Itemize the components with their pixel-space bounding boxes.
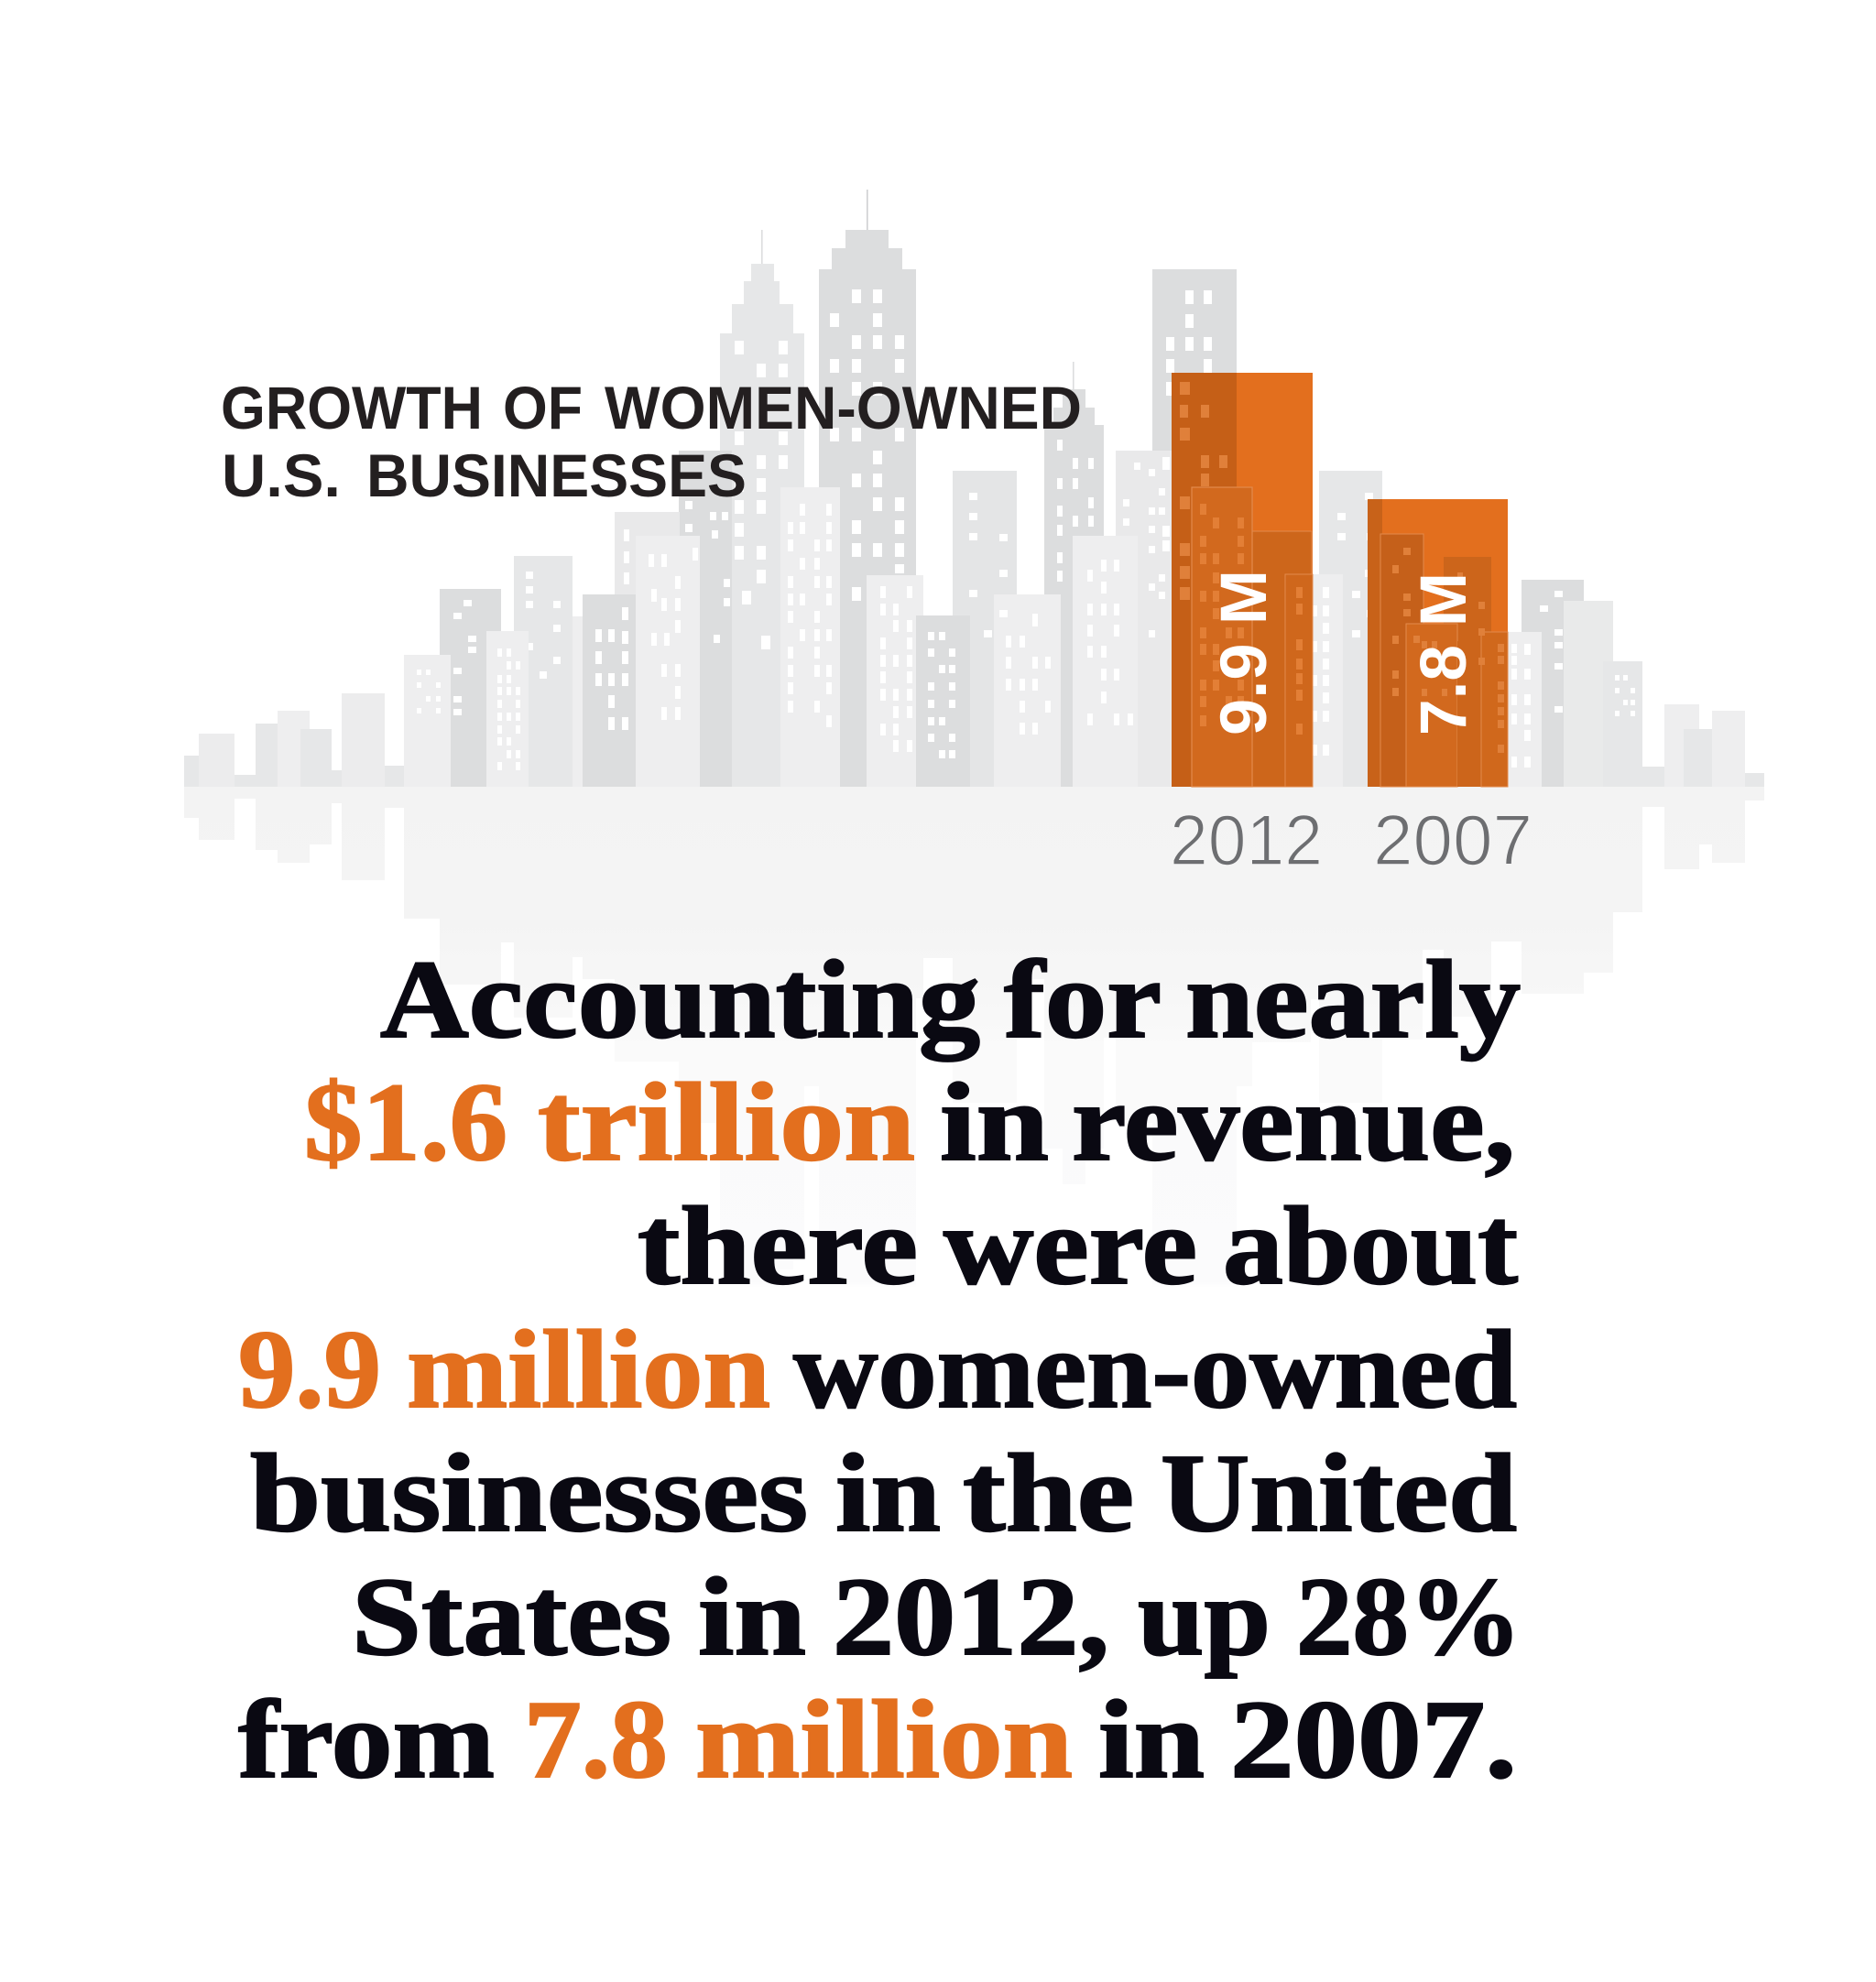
building: light tall left	[636, 536, 700, 787]
building: small windows	[404, 655, 451, 787]
main statement text: 2007.	[1230, 1678, 1517, 1802]
city skyline	[184, 190, 1764, 787]
main statement text: in	[1098, 1678, 1205, 1802]
building: dark with grid	[583, 594, 636, 787]
main statement text: businesses	[250, 1432, 808, 1555]
building: light tall centre	[780, 487, 840, 787]
chart title: OF	[503, 374, 583, 441]
building: pale left of 2012 bar	[1116, 451, 1172, 787]
skyline reflection	[184, 787, 1764, 1344]
building: dark block with wide windows	[679, 451, 732, 787]
chart title: GROWTH	[221, 374, 483, 441]
chart title: BUSINESSES	[366, 441, 747, 509]
building: dark small windows	[916, 615, 970, 787]
main statement text: up	[1138, 1555, 1271, 1679]
bar: 2007	[1368, 499, 1508, 787]
far right low buildings	[1642, 704, 1764, 787]
main statement text: United	[1161, 1432, 1517, 1555]
building: medium grey	[514, 556, 583, 787]
main statement text: were	[943, 1184, 1197, 1308]
buildings: right side	[1481, 580, 1642, 787]
main statement text: the	[963, 1432, 1134, 1555]
building: right of 2012 bar	[1285, 574, 1343, 787]
main statement text: women-owned	[793, 1308, 1517, 1432]
main statement text: 2012,	[833, 1555, 1109, 1679]
chart title: U.S.	[222, 441, 341, 509]
main statement text: there	[638, 1184, 918, 1308]
main statement text	[238, 938, 1522, 1802]
tower: twin dark	[819, 190, 916, 787]
chart title	[221, 374, 1082, 509]
main statement text: 7.8	[524, 1678, 668, 1802]
far left low buildings	[184, 693, 404, 787]
building: narrow light	[486, 631, 529, 787]
chart title: WOMEN-OWNED	[605, 374, 1082, 441]
building: between bars	[1319, 471, 1382, 787]
main statement text: trillion	[538, 1061, 915, 1184]
year labels: 2007	[1373, 800, 1532, 880]
main statement text: from	[238, 1678, 495, 1802]
main statement text: million	[407, 1308, 770, 1432]
tower: stepped spire	[720, 230, 804, 787]
main statement text: $1.6	[304, 1061, 507, 1184]
main statement text: Accounting	[380, 938, 980, 1062]
main statement text: in	[940, 1061, 1049, 1184]
main statement text: about	[1223, 1184, 1518, 1308]
building: pale mid	[615, 512, 680, 787]
building: tall behind 2012 bar	[1152, 269, 1237, 787]
main statement text: million	[695, 1678, 1073, 1802]
year labels	[1170, 800, 1532, 880]
building: light right of tower	[994, 594, 1061, 787]
building: dark block	[440, 589, 501, 787]
bar: 2012	[1172, 373, 1313, 787]
building: light short centre	[867, 575, 923, 787]
building: right of centre medium	[953, 471, 1017, 787]
tower: second stepped dark	[1044, 362, 1104, 787]
main statement text: in	[835, 1432, 941, 1555]
value: 9.9 M: 9.9 M	[1208, 570, 1281, 735]
building: light in front	[1073, 536, 1138, 787]
main statement text: for	[1004, 938, 1162, 1062]
main statement text: nearly	[1185, 938, 1521, 1062]
main statement text: 9.9	[238, 1308, 381, 1432]
main statement text: States	[352, 1555, 671, 1679]
main statement text: 28%	[1296, 1555, 1522, 1679]
main statement text: revenue,	[1072, 1061, 1515, 1184]
year labels: 2012	[1170, 800, 1323, 880]
value: 7.8 M: 7.8 M	[1408, 572, 1480, 735]
main statement text: in	[698, 1555, 806, 1679]
